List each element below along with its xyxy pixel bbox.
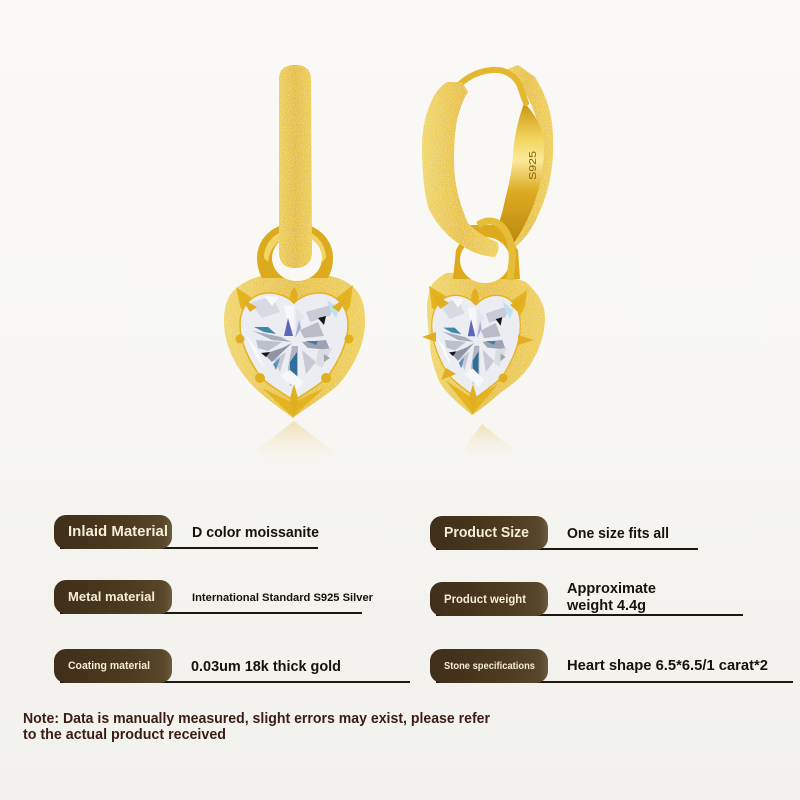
- spec row: metal material: International Standard S925 Silver: [192, 592, 374, 604]
- jump ring: [257, 223, 333, 278]
- spec row: product size: Product Size: [444, 524, 529, 541]
- prongs: [236, 287, 354, 416]
- frosted hoop front view: [279, 65, 312, 268]
- reflection of left heart: [254, 421, 334, 462]
- spec row: inlaid material: Inlaid Material: [68, 523, 168, 540]
- spec row: product weight: Approximate: [567, 580, 656, 597]
- spec row: metal material: [54, 580, 374, 614]
- heart setting: [224, 275, 365, 418]
- spec row: product weight: weight 4.4g: [566, 597, 646, 614]
- note: Note: Data is manually measured, slight errors may exist, please refer: [23, 711, 490, 727]
- spec row: coating material: [54, 649, 410, 683]
- spec row: product size: [430, 516, 698, 550]
- dangling ring front: [478, 221, 512, 280]
- frosted hoop crescent: [422, 82, 498, 257]
- thin top wire: [460, 70, 526, 103]
- outer right band: [500, 65, 553, 247]
- spec row: product weight: Product weight: [444, 592, 526, 606]
- S925 stamp: S925: [527, 151, 539, 180]
- spec row: product size: One size fits all: [567, 526, 669, 542]
- spec row: inlaid material: [54, 515, 319, 549]
- spec row: stone specifications: Heart shape 6.5*6.5/1 carat*2: [567, 657, 768, 674]
- spec row: coating material: 0.03um 18k thick gold: [191, 658, 341, 675]
- polished corner facets: [236, 285, 353, 417]
- spec row: stone specifications: [430, 649, 793, 683]
- inner polished band: [492, 103, 544, 246]
- dangling ring back: [453, 225, 520, 279]
- heart stone: [240, 293, 348, 401]
- ring opening right: [460, 237, 510, 283]
- spec row: coating material: Coating material: [68, 660, 150, 672]
- right prongs: [422, 288, 534, 415]
- polished facets right: [429, 286, 527, 414]
- right earring: [422, 65, 553, 458]
- spec row: metal material: Metal material: [68, 589, 155, 604]
- heart stone right: [432, 295, 520, 398]
- spec row: inlaid material: D color moissanite: [192, 524, 319, 541]
- note: [23, 711, 490, 743]
- note: to the actual product received: [23, 727, 226, 743]
- spec row: product weight: [430, 580, 743, 616]
- left earring: [224, 65, 365, 462]
- reflection of right heart: [464, 424, 514, 458]
- spec row: stone specifications: Stone specifications: [444, 660, 535, 672]
- heart setting right: [427, 273, 545, 415]
- ring opening: [272, 235, 322, 281]
